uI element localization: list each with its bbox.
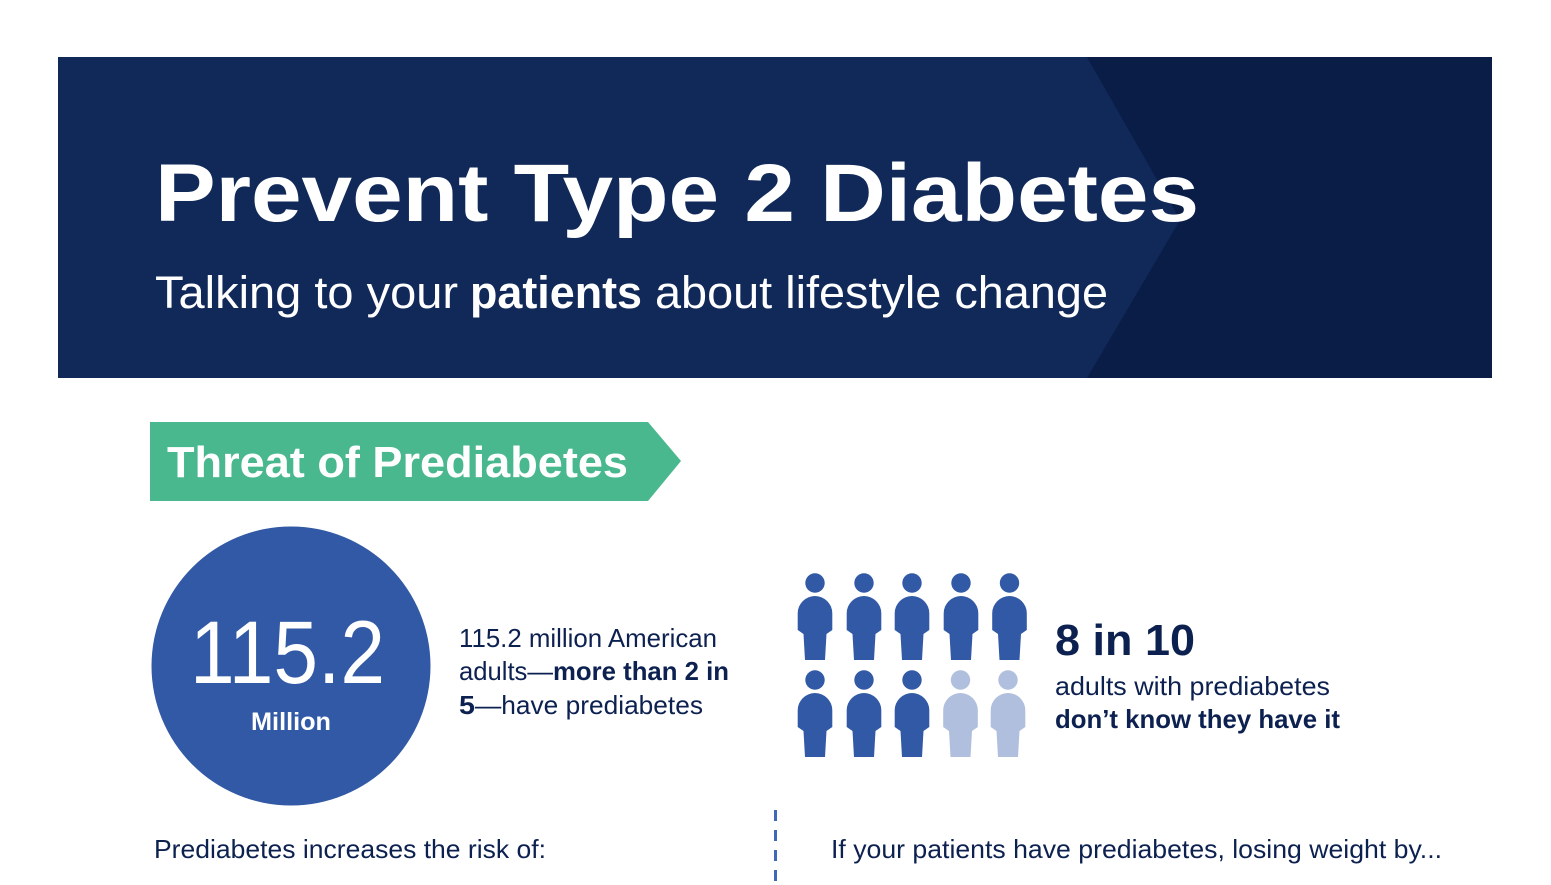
banner arrow shape <box>58 57 1180 378</box>
text: 115.2 million description: —have prediabetes <box>475 690 703 720</box>
section heading: Threat of Prediabetes <box>150 422 681 501</box>
text: risk intro: Prediabetes increases the risk of: <box>154 834 546 864</box>
header banner <box>58 57 1492 378</box>
stat text: 8 in 10: adults with prediabetes <box>1055 671 1330 701</box>
text: 115.2 million description <box>459 623 729 720</box>
stat text: 8 in 10: 8 in 10 <box>1055 616 1195 665</box>
subtitle: Talking to your <box>155 267 458 318</box>
text: 115.2 million description: adults— <box>459 656 553 686</box>
text: 115.2 million description: 115.2 million American <box>459 623 717 653</box>
subtitle: about lifestyle change <box>655 267 1108 318</box>
stat text: 8 in 10: don’t know they have it <box>1055 704 1340 734</box>
subtitle <box>155 267 1108 318</box>
stat circle: 115.2 million: 115.2 <box>190 602 385 702</box>
stat text: 8 in 10 <box>1055 616 1340 734</box>
stat circle: 115.2 million: Million <box>251 708 331 736</box>
title: Prevent Type 2 Diabetes <box>155 148 1199 239</box>
icon array: 8 in 10 people <box>798 573 1027 757</box>
text: 115.2 million description: 5 <box>459 690 475 720</box>
section heading: Threat of Prediabetes: Threat of Prediabetes <box>167 438 628 487</box>
subtitle: patients <box>470 267 642 318</box>
stat circle: 115.2 million <box>152 526 430 806</box>
text: 115.2 million description: more than 2 in <box>553 656 729 686</box>
text: weight loss intro: If your patients have prediabetes, losing weight by... <box>831 834 1442 864</box>
